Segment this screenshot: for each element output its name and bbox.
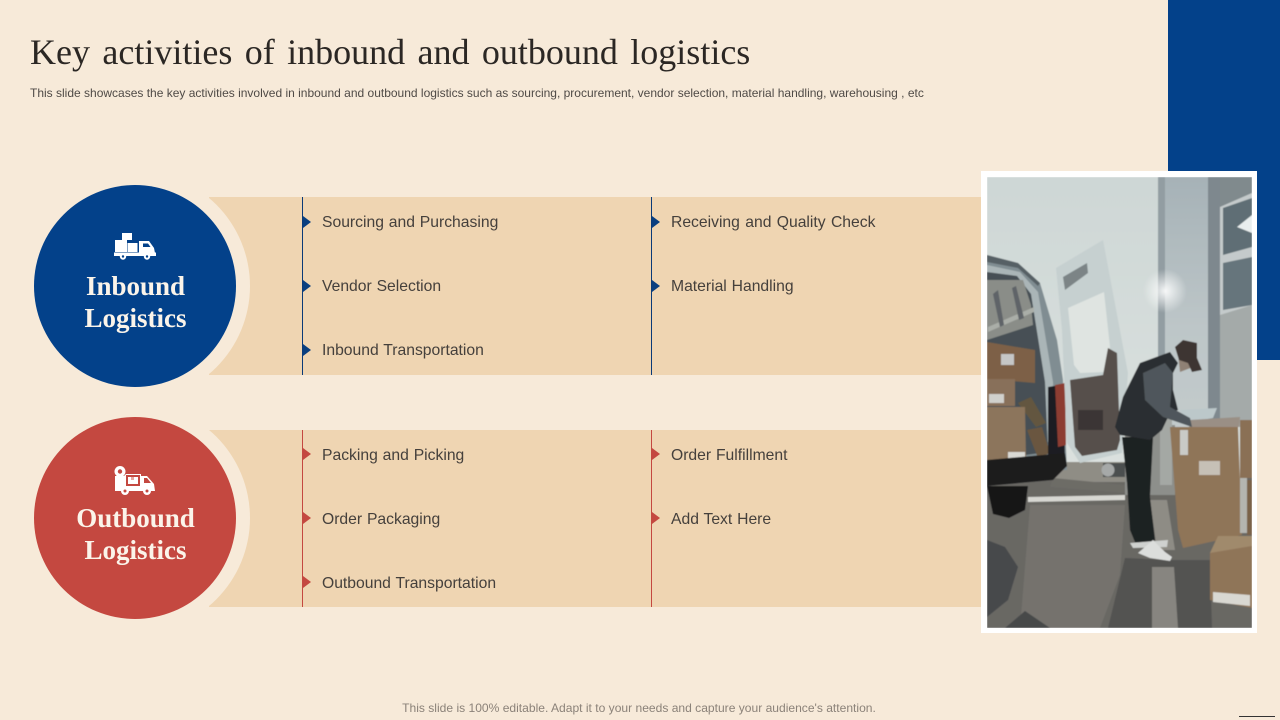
footer note: This slide is 100% editable. Adapt it to your needs and capture your audience's attention. — [402, 701, 876, 715]
outbound heading — [76, 503, 195, 565]
panel: inbound logistics — [34, 185, 981, 387]
inbound heading — [84, 271, 186, 333]
outbound item: Packing and Picking — [322, 447, 464, 464]
man — [1122, 437, 1155, 547]
outbound halo — [209, 430, 250, 606]
icon: outbound truck — [114, 466, 155, 495]
outbound circle — [34, 417, 236, 619]
subtitle: This slide showcases the key activities involved in inbound and outbound logistics such as sourcing, procurement, vendor selection, material handling, warehousing , etc — [30, 86, 924, 100]
ground — [987, 478, 1252, 628]
inbound halo — [209, 198, 250, 374]
icon: inbound truck — [114, 233, 156, 260]
page marker line — [1239, 716, 1275, 717]
van — [987, 255, 1067, 470]
outbound arrows — [303, 448, 660, 588]
outbound heading: Logistics — [84, 535, 186, 565]
outbound item: Order Fulfillment — [671, 447, 787, 464]
inbound item: Sourcing and Purchasing — [322, 214, 498, 231]
inbound heading: Logistics — [84, 303, 186, 333]
inbound heading: Inbound — [86, 271, 185, 301]
inbound divider left — [302, 197, 303, 375]
inbound item: Vendor Selection — [322, 278, 441, 295]
inbound divider right — [651, 197, 652, 375]
outbound item: Order Packaging — [322, 511, 440, 528]
inbound item: Receiving and Quality Check — [671, 214, 875, 231]
door — [1056, 240, 1128, 463]
outbound divider left — [302, 430, 303, 607]
outbound item: Add Text Here — [671, 511, 771, 528]
inbound circle — [34, 185, 236, 387]
inbound band — [209, 197, 981, 375]
outbound heading: Outbound — [76, 503, 195, 533]
boxes — [1170, 427, 1242, 548]
inbound arrows — [303, 216, 660, 356]
outbound divider right — [651, 430, 652, 607]
inbound item: Material Handling — [671, 278, 794, 295]
photo: worker loading a delivery van — [981, 171, 1257, 633]
stacked goods on box — [1208, 408, 1218, 420]
blue corner block — [1168, 0, 1280, 360]
outbound item: Outbound Transportation — [322, 575, 496, 592]
outbound band — [209, 430, 981, 607]
panel: outbound logistics — [34, 417, 981, 619]
title: Key activities of inbound and outbound logistics — [30, 32, 750, 72]
inbound item: Inbound Transportation — [322, 342, 484, 359]
